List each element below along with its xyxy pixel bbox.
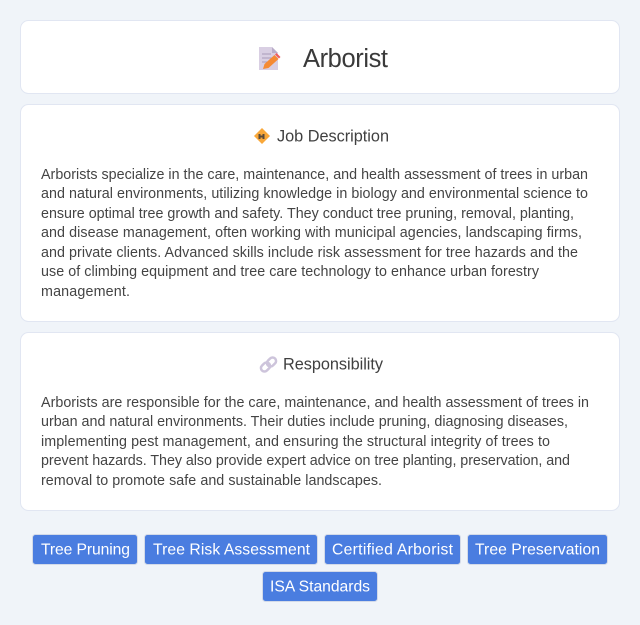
icon: orange diamond <box>254 128 270 144</box>
job description text: ensure optimal tree growth and safety. They conduct tree pruning, removal, planting, <box>41 206 574 222</box>
job description text <box>41 167 588 300</box>
panel: job description <box>20 104 620 322</box>
job description text: and disease management, often working with municipal agencies, landscaping firms, <box>41 225 582 241</box>
tag: Tree Preservation: Tree Preservation <box>475 542 600 558</box>
panel: responsibility <box>20 332 620 510</box>
responsibility text: Arborists are responsible for the care, maintenance, and health assessment of trees in <box>41 395 589 411</box>
tag: Certified Arborist: Certified Arborist <box>332 542 454 558</box>
responsibility text <box>41 395 589 489</box>
tag: Tree Preservation <box>468 534 608 564</box>
job description text: management. <box>41 284 130 300</box>
job description text: Arborists specialize in the care, maintenance, and health assessment of trees in urban <box>41 167 588 183</box>
icon: document with pencil <box>259 47 280 70</box>
tag: Tree Pruning: Tree Pruning <box>41 542 130 558</box>
job description text: and natural environments, utilizing knowledge in biology and environmental science to <box>41 186 588 202</box>
heading: responsibility: Responsibility <box>283 356 384 374</box>
icon: chain link <box>259 356 278 373</box>
responsibility text: prevent hazards. They also provide expert advice on tree planting, preservation, and <box>41 453 570 469</box>
responsibility text: implementing pest management, and ensuring the structural integrity of trees to <box>41 434 550 450</box>
tag: Tree Pruning <box>32 534 138 564</box>
tag: ISA Standards <box>262 572 378 602</box>
tag: ISA Standards: ISA Standards <box>270 578 370 596</box>
responsibility text: urban and natural environments. Their duties include pruning, diagnosing diseases, <box>41 414 568 430</box>
tag: Certified Arborist <box>324 534 460 564</box>
panel: title <box>20 20 620 94</box>
tag: Tree Risk Assessment: Tree Risk Assessment <box>153 542 311 558</box>
title text: Arborist <box>303 45 388 73</box>
responsibility text: removal to promote safe and sustainable landscapes. <box>41 473 382 489</box>
tag: Tree Risk Assessment <box>144 534 318 564</box>
heading: job description: Job Description <box>277 128 389 146</box>
job description text: use of climbing equipment and tree care technology to enhance urban forestry <box>41 264 540 280</box>
job description text: and private clients. Advanced skills include risk assessment for tree hazards and the <box>41 245 578 261</box>
